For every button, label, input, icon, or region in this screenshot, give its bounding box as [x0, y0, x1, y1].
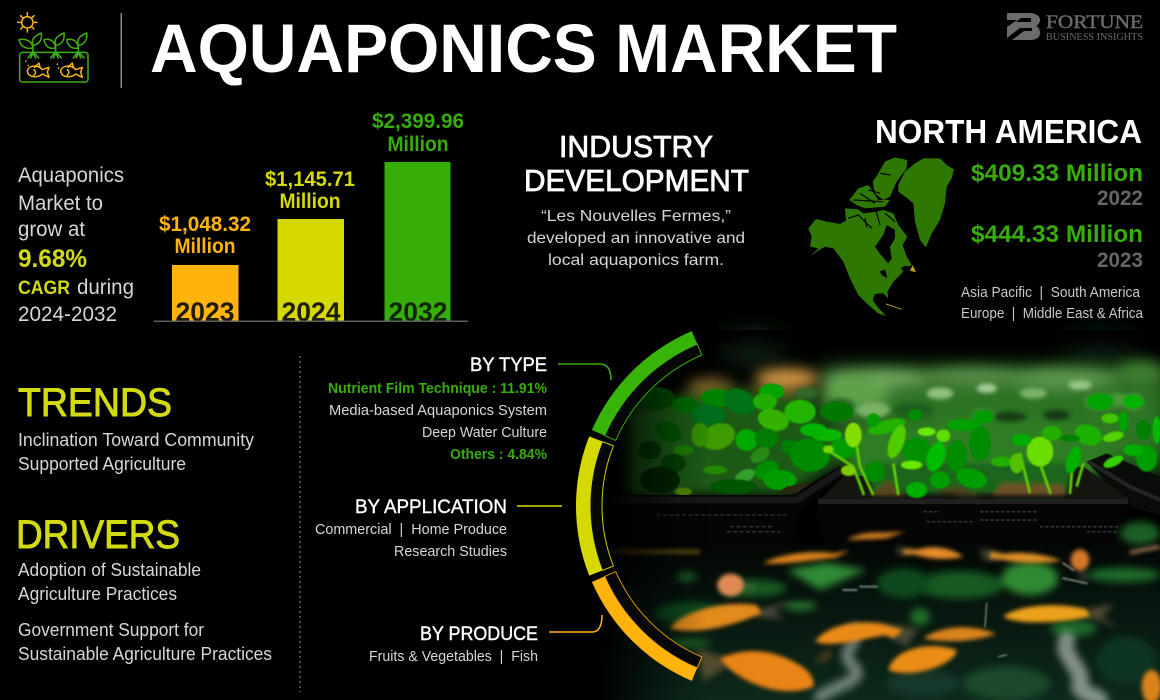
CAGR statement: during — [77, 276, 134, 299]
North America figures: $444.33 Million — [971, 221, 1143, 248]
bar 2024: 2024 — [282, 297, 340, 327]
icon: aquaponics sun, plants and fish — [18, 13, 88, 82]
segment: by produce: Fruits & Vegetables | Fish — [369, 649, 538, 665]
segment: by application: Research Studies — [394, 544, 507, 560]
bar 2032: 2032 — [388, 297, 448, 327]
industry development: local aquaponics farm. — [548, 252, 724, 269]
bar 2023 — [159, 213, 251, 327]
industry development — [524, 129, 749, 269]
segment: by type: BY TYPE — [470, 355, 547, 376]
bar 2032: Million — [388, 133, 448, 156]
North America figures: Asia Pacific | South America — [961, 285, 1141, 301]
CAGR statement: 2024-2032 — [18, 303, 117, 326]
centre plant base and gravel — [867, 463, 1073, 496]
segment: by type: Others : 4.84% — [450, 447, 547, 463]
drivers: Sustainable Agriculture Practices — [18, 644, 272, 664]
segment: by type: Deep Water Culture — [422, 425, 547, 441]
photo fades — [597, 330, 707, 700]
North America figures — [875, 113, 1144, 322]
icon: seedlings — [19, 33, 87, 58]
fish — [607, 532, 1160, 700]
industry development: “Les Nouvelles Fermes,” — [541, 208, 731, 225]
logo: Fortune Business Insights: FORTUNE — [1046, 12, 1143, 33]
drivers: DRIVERS — [16, 513, 180, 557]
segment: by application: BY APPLICATION — [355, 497, 507, 518]
left plant leaves — [638, 383, 857, 496]
drivers: Government Support for — [18, 620, 204, 640]
fish tails — [697, 547, 1118, 682]
CAGR statement: grow at — [18, 218, 85, 241]
drivers: Adoption of Sustainable — [18, 560, 201, 580]
icon: planter box — [20, 52, 88, 82]
title: AQUAPONICS MARKET — [150, 10, 897, 87]
divider — [120, 13, 122, 88]
arc: green type segment — [592, 331, 702, 440]
segment: by type: Nutrient Film Technique : 11.91% — [328, 381, 547, 397]
right tray — [1087, 453, 1160, 515]
trends — [18, 381, 254, 474]
centre plant leaves — [823, 393, 1160, 498]
North America figures: Europe | Middle East & Africa — [961, 306, 1144, 322]
drivers: Agriculture Practices — [18, 584, 177, 604]
CAGR statement: Aquaponics — [18, 164, 124, 187]
arc: yellow application segment — [576, 436, 613, 576]
background leaf texture — [795, 380, 1143, 422]
background foliage (blurred) — [720, 333, 1160, 470]
bar 2032: $2,399.96 — [372, 110, 464, 133]
segment: by application — [315, 497, 562, 560]
photo: aquaponics trays with plants and fish — [597, 330, 1160, 700]
icon: two fish — [26, 61, 82, 77]
North America figures: 2022 — [1097, 187, 1143, 210]
trends: Inclination Toward Community — [18, 430, 254, 450]
CAGR statement: 9.68% — [18, 245, 87, 273]
segment: by produce — [369, 615, 602, 665]
logo: Fortune Business Insights — [1007, 12, 1143, 43]
CAGR statement: CAGR — [18, 278, 70, 299]
bar 2024: $1,145.71 — [265, 168, 355, 191]
North America figures: NORTH AMERICA — [875, 113, 1142, 150]
bar 2024 — [265, 168, 355, 327]
North America figures: 2023 — [1097, 249, 1143, 272]
centre tray — [820, 467, 1130, 500]
CAGR statement: Market to — [18, 192, 103, 215]
trends: Supported Agriculture — [18, 454, 186, 474]
bar 2032 — [372, 110, 464, 327]
CAGR statement — [18, 164, 134, 326]
industry development: developed an innovative and — [527, 230, 745, 247]
left tray — [597, 467, 843, 547]
trends: TRENDS — [18, 381, 172, 425]
bar 2023: $1,048.32 — [159, 213, 251, 236]
industry development: INDUSTRY — [559, 129, 713, 164]
water highlights — [820, 630, 1100, 700]
bar 2024: Million — [280, 190, 340, 213]
segment: by produce: BY PRODUCE — [420, 624, 538, 645]
segment: by type — [328, 355, 611, 463]
arc: orange produce segment — [592, 572, 702, 681]
industry development: DEVELOPMENT — [524, 163, 749, 198]
map: North America — [808, 157, 954, 316]
bar chart — [154, 110, 468, 327]
logo: Fortune Business Insights: BUSINESS INSIGHTS — [1046, 32, 1143, 43]
bar 2023: 2023 — [176, 297, 234, 327]
North America figures: $409.33 Million — [971, 160, 1143, 187]
icon: sun — [18, 13, 37, 32]
segment: by application: Commercial | Home Produce — [315, 522, 507, 538]
segment: by type: Media-based Aquaponics System — [329, 403, 547, 419]
drivers — [16, 513, 272, 664]
water reflections — [653, 522, 1160, 700]
bar 2023: Million — [174, 235, 236, 258]
